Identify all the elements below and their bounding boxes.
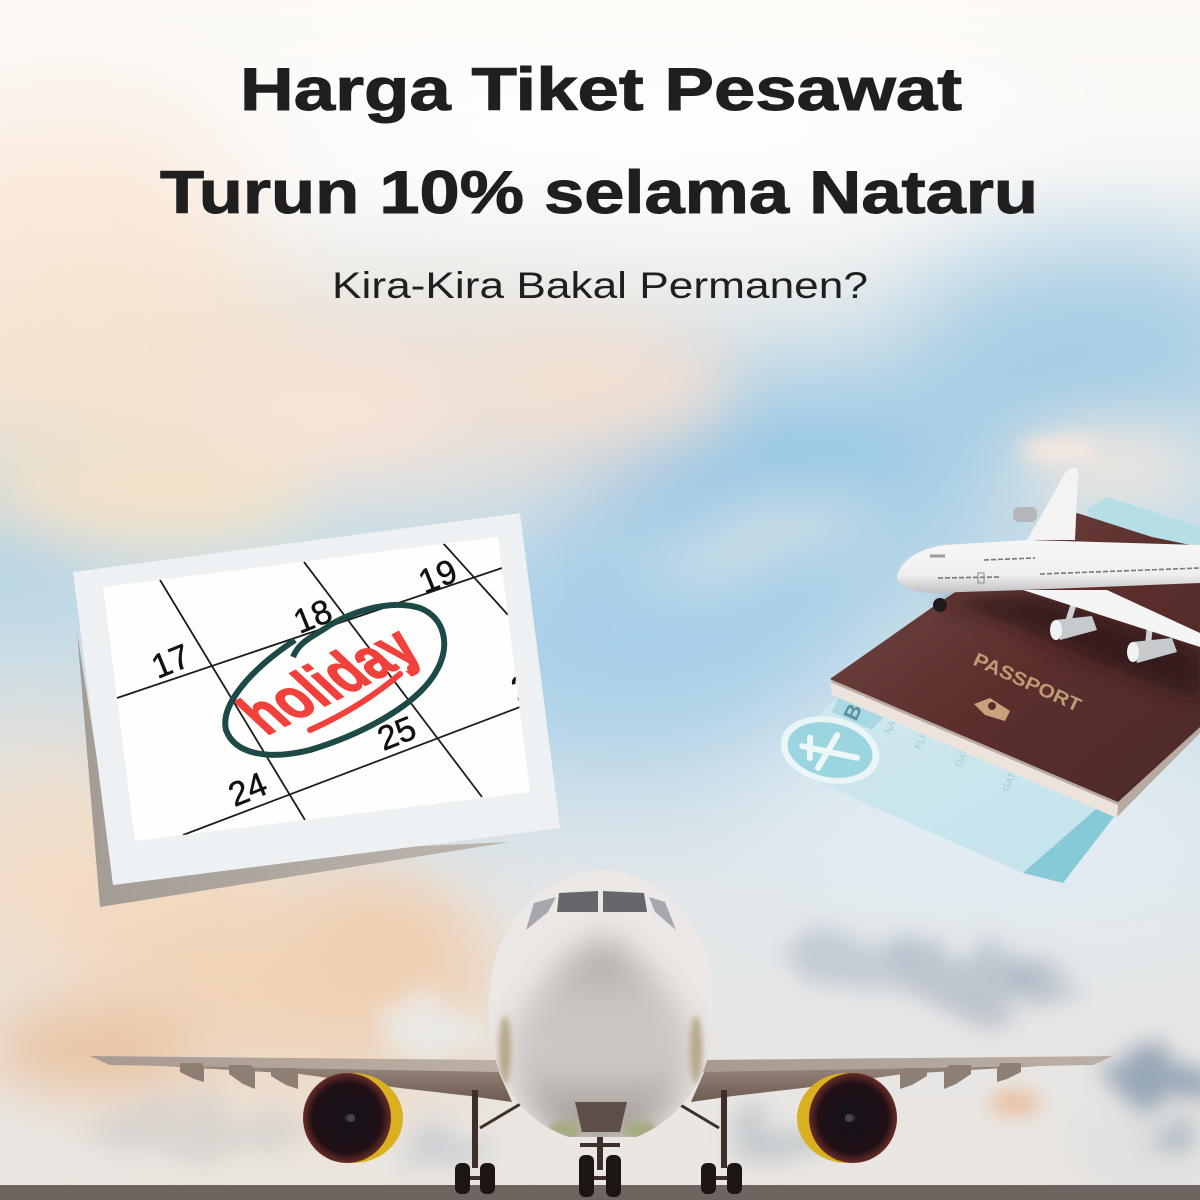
photo: passport, ticket and toy plane xyxy=(774,468,1200,883)
runway xyxy=(0,1185,1200,1200)
left engine xyxy=(303,1073,403,1163)
boarding pass: FLIGHT xyxy=(913,714,938,751)
passport cover xyxy=(830,513,1200,817)
holiday handwriting: holiday xyxy=(222,614,435,746)
boarding pass: DATE xyxy=(954,741,975,769)
right wing underside xyxy=(691,1062,1107,1102)
calendar page xyxy=(103,537,530,841)
date numbers: 17 xyxy=(146,637,196,687)
boarding pass: BC xyxy=(840,687,873,724)
left wing top xyxy=(90,1056,500,1072)
date numbers: 2 xyxy=(506,667,538,709)
landing gear xyxy=(466,1090,730,1178)
nose gear bay xyxy=(575,1102,627,1132)
main airplane, front view xyxy=(0,870,1200,1200)
boarding pass xyxy=(774,687,1117,883)
date numbers: 25 xyxy=(372,709,422,759)
title xyxy=(160,56,1038,226)
underline xyxy=(310,666,412,730)
right engine xyxy=(797,1073,897,1163)
flap fairings xyxy=(180,1063,1021,1089)
shadow of the toy plane xyxy=(935,595,1200,700)
nose shading xyxy=(499,938,702,1145)
title: Harga Tiket Pesawat xyxy=(240,56,962,123)
upper ticket edge xyxy=(1087,497,1200,560)
date numbers xyxy=(152,560,519,807)
date numbers: 19 xyxy=(413,552,463,602)
left wing underside xyxy=(96,1062,512,1102)
boarding pass: GATE xyxy=(1001,764,1022,793)
cockpit windows xyxy=(526,891,676,930)
title: Turun 10% selama Nataru xyxy=(160,159,1038,226)
photo frame xyxy=(73,513,560,885)
passport emblem xyxy=(974,698,1010,721)
fuselage xyxy=(488,870,714,1137)
photo: holiday calendar xyxy=(73,513,560,907)
date numbers: 18 xyxy=(288,592,338,642)
right wing top xyxy=(703,1056,1113,1072)
subtitle: Kira-Kira Bakal Permanen? xyxy=(332,265,868,306)
passport lettering: PASSPORT xyxy=(970,649,1085,717)
date numbers: 24 xyxy=(223,765,273,815)
photo shadow xyxy=(77,632,510,907)
holiday circle xyxy=(225,605,444,755)
boarding pass: NAME xyxy=(883,705,905,736)
toy plane xyxy=(897,468,1200,663)
